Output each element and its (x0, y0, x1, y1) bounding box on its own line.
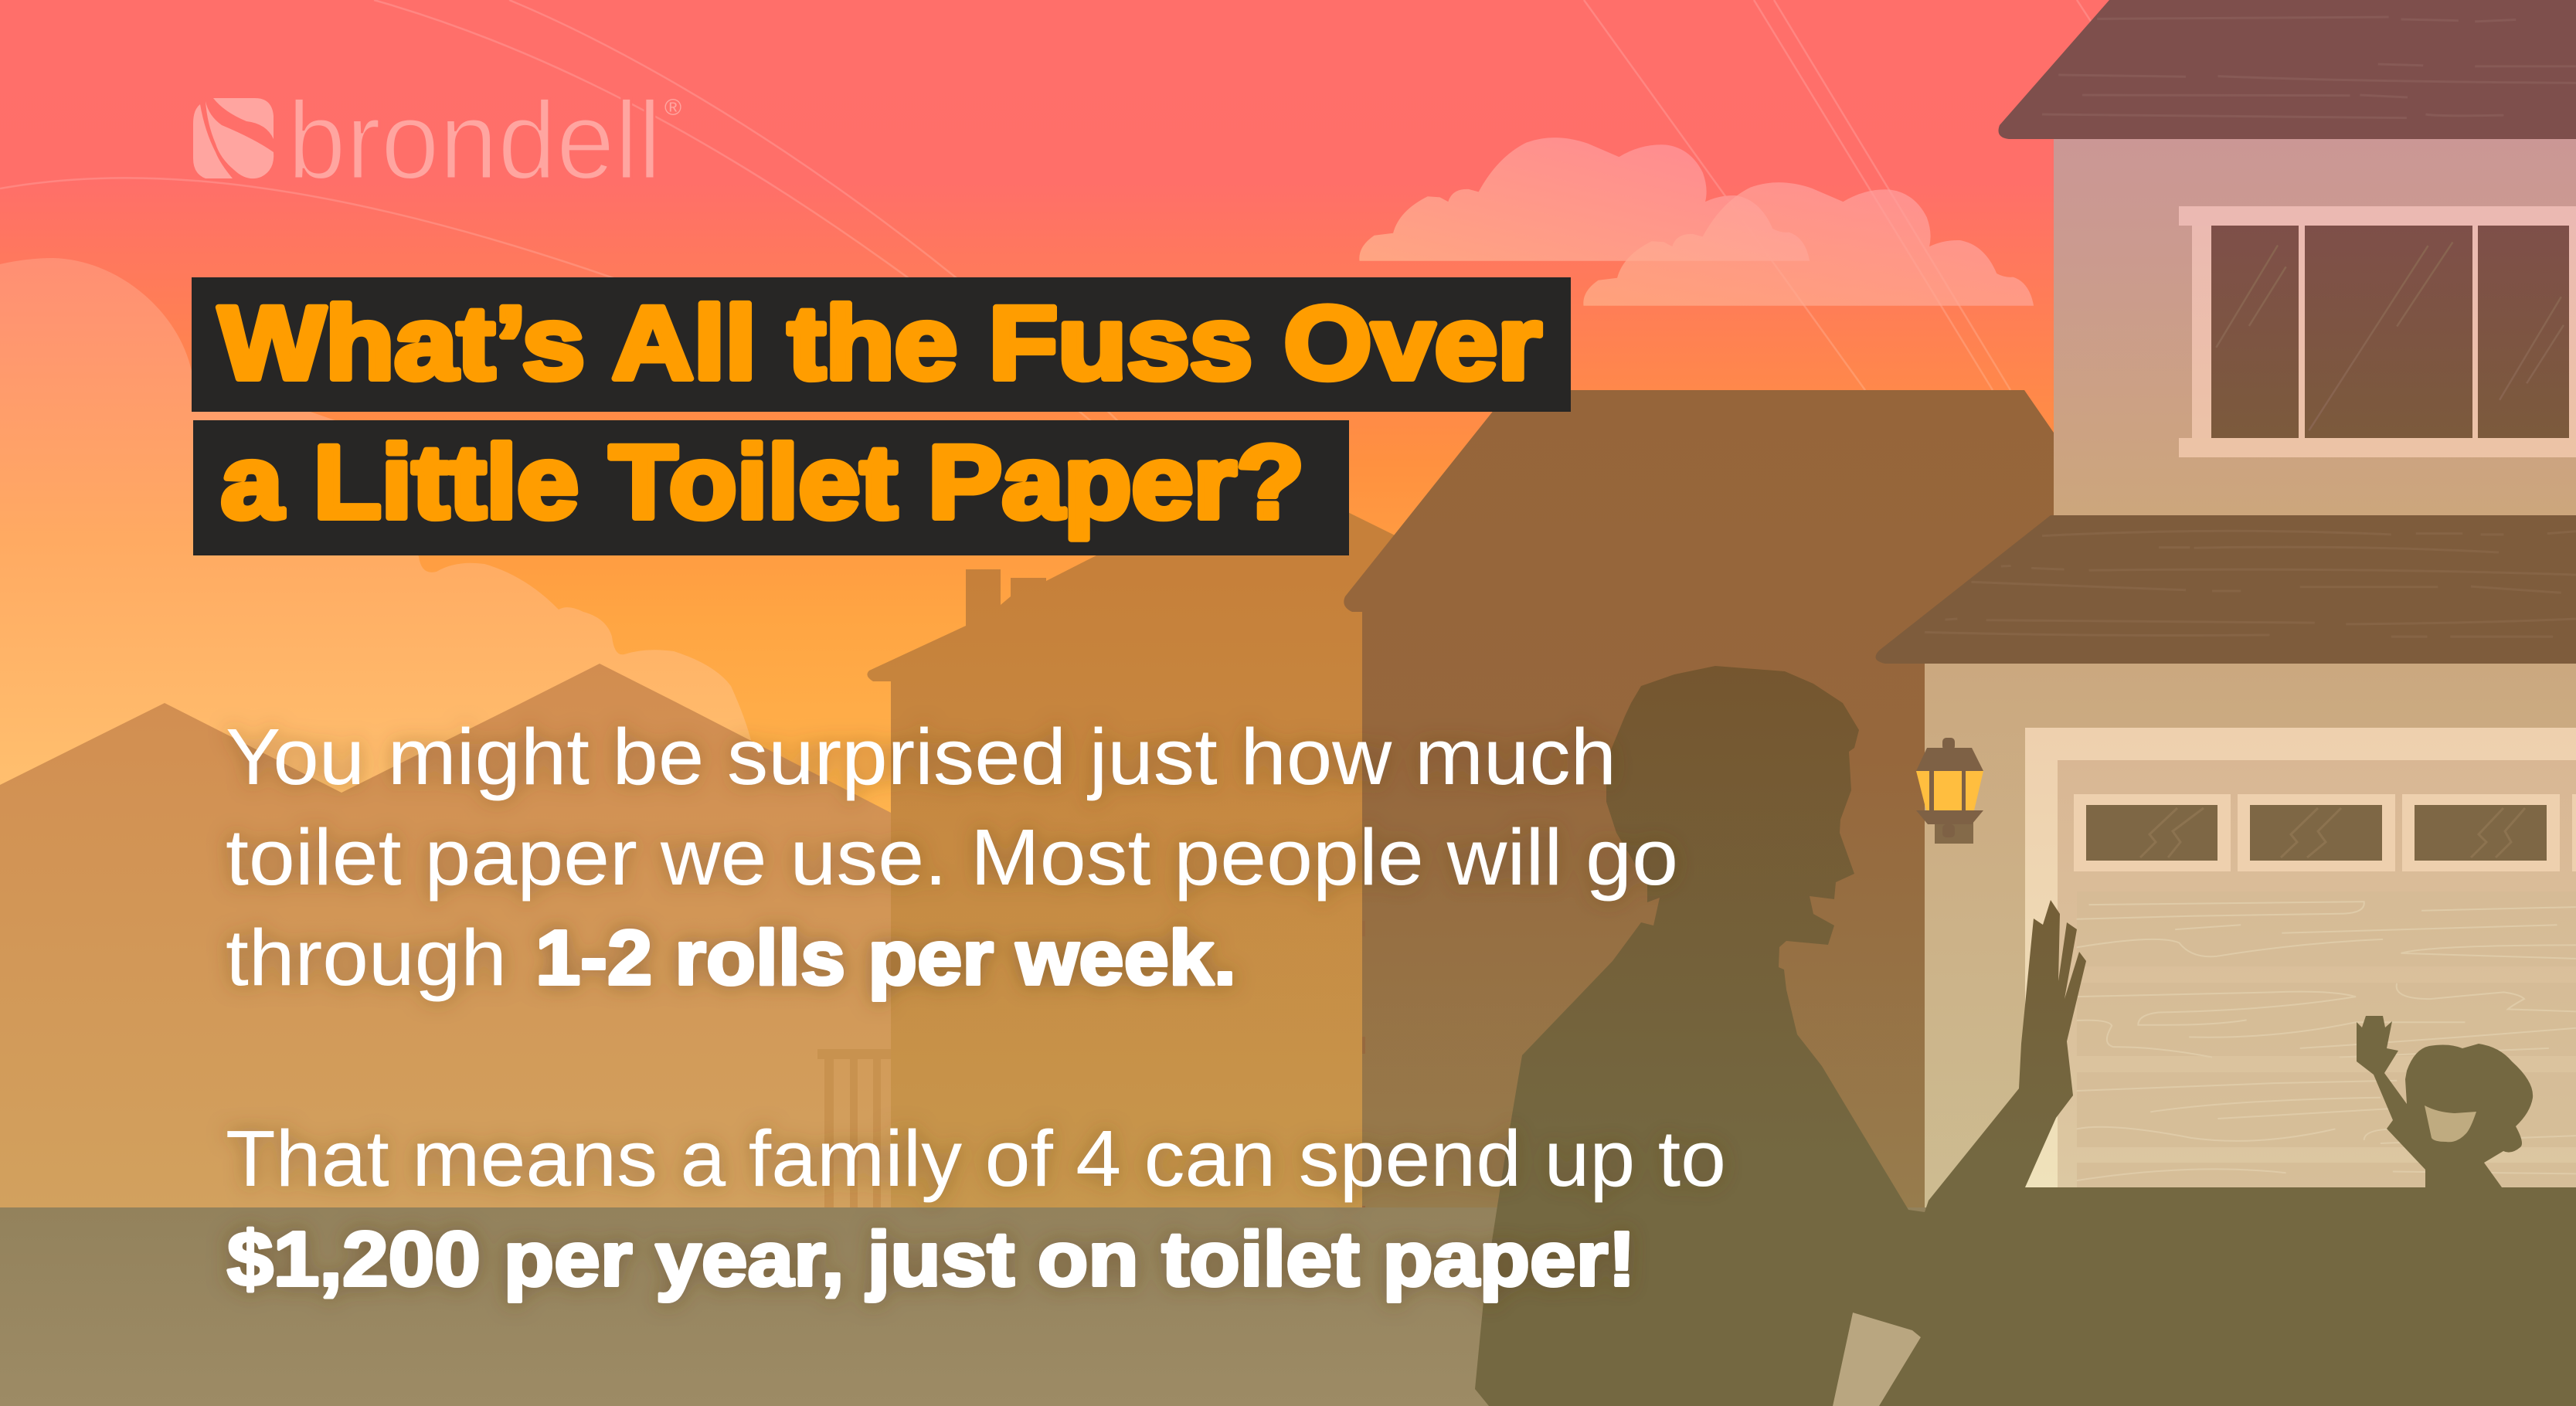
large neighbouring house (1344, 390, 2054, 1207)
window reflections (2216, 242, 2564, 430)
paragraph 1: You might be surprised just how much (226, 712, 1616, 801)
title banner line 1 (192, 277, 1571, 412)
ground strip (0, 1207, 1932, 1406)
upper roof (1998, 0, 2576, 139)
paragraph 2: That means a family of 4 can spend up to (226, 1114, 1726, 1203)
ground between legs (1833, 1313, 1921, 1406)
child face (2425, 1105, 2476, 1142)
paragraph 1: toilet paper we use. Most people will go (226, 813, 1678, 902)
paragraph 1 (226, 712, 1678, 1002)
porch railing (817, 1049, 891, 1207)
upper window (2179, 206, 2576, 457)
upper roof shingle marks (2042, 17, 2576, 118)
door panels (2077, 891, 2576, 1194)
cloud 1 (1359, 138, 1810, 261)
cloud 2 (1583, 182, 2034, 306)
brondell logo (193, 80, 681, 202)
lower roof shingle marks (1925, 531, 2576, 637)
garage door (2025, 728, 2576, 1207)
lower roof (1876, 515, 2576, 664)
title line 2 text: a Little Toilet Paper? (221, 425, 1304, 540)
paragraph 2: $1,200 per year, just on toilet paper! (227, 1216, 1636, 1302)
title banner line 2 (193, 420, 1349, 555)
logo wordmark: brondell (287, 80, 661, 202)
wood grain (2077, 902, 2576, 1180)
man silhouette waving with hedge foreground (1475, 666, 2576, 1406)
logo mark (193, 98, 274, 178)
icon: wall lantern (1916, 738, 1983, 844)
paragraph 2 (226, 1114, 1726, 1302)
main house upper wall (2054, 131, 2576, 518)
cornice notches (1362, 921, 1365, 1209)
sky arcs (0, 0, 2092, 494)
large left cloud (0, 258, 773, 850)
middle house silhouette (817, 469, 1437, 1207)
registered mark: ® (664, 95, 681, 121)
title line 1 text: What’s All the Fuss Over (219, 286, 1541, 401)
main house lower wall (1925, 657, 2576, 1213)
child silhouette waving (2357, 1016, 2533, 1205)
body copy (226, 712, 1726, 1302)
title (192, 277, 1571, 555)
garage windows (2074, 794, 2576, 871)
distant house rooftops (0, 664, 927, 1207)
paragraph 1: 1-2 rolls per week. (535, 915, 1236, 1001)
paragraph 1: through (226, 913, 507, 1002)
